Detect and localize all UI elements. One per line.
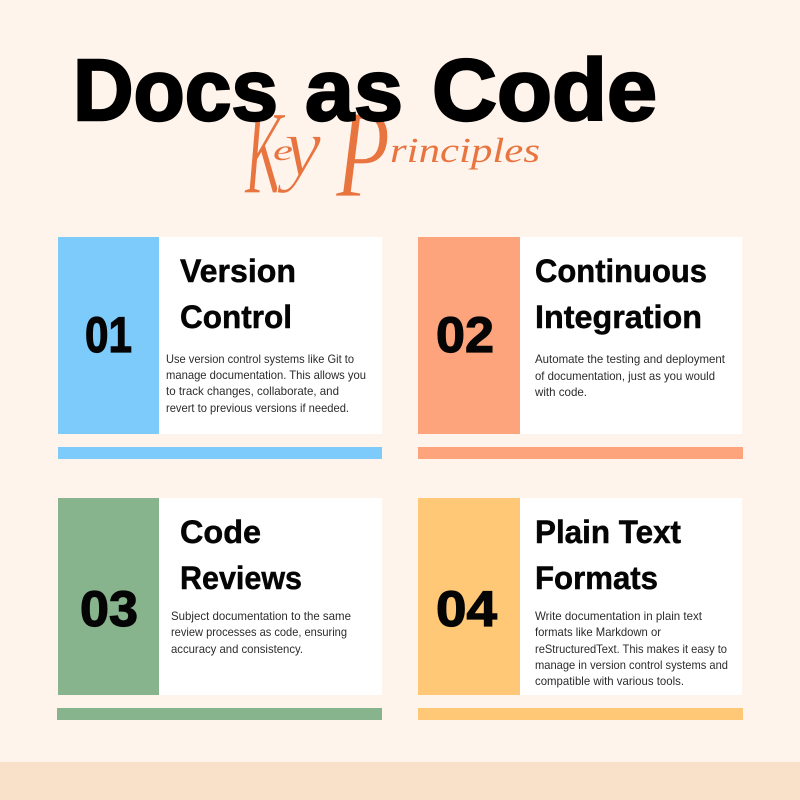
title: Docs — [73, 42, 278, 139]
title: as — [305, 42, 403, 139]
panel background — [520, 498, 742, 695]
body text — [535, 610, 728, 688]
body text — [171, 610, 351, 656]
panel background — [159, 237, 382, 434]
body text: with code. — [534, 386, 587, 399]
title: Code — [432, 42, 657, 139]
accent bar — [418, 447, 743, 459]
number block — [58, 498, 159, 695]
title — [73, 42, 657, 139]
heading — [535, 514, 681, 596]
panel: 04 plain text formats — [418, 498, 743, 720]
heading: Continuous — [535, 253, 707, 289]
heading — [180, 253, 296, 335]
heading: Reviews — [180, 560, 302, 596]
heading — [180, 514, 302, 596]
panel background — [520, 237, 742, 434]
subtitle: key principles: rinciples — [390, 131, 540, 170]
subtitle: key principles — [244, 86, 540, 224]
heading — [535, 253, 707, 335]
number: 04 — [436, 581, 497, 637]
number: 02 — [436, 307, 494, 363]
accent bar — [418, 708, 743, 720]
number: 01 — [85, 307, 132, 363]
body text: Automate the testing and deployment — [535, 353, 726, 366]
panel background — [159, 498, 382, 695]
bottom band — [0, 762, 800, 800]
number block — [418, 237, 520, 434]
accent bar — [58, 447, 382, 459]
body text: Subject documentation to the same — [171, 610, 351, 623]
body text: reStructuredText. This makes it easy to — [535, 643, 727, 656]
number block — [418, 498, 520, 695]
body text: review processes as code, ensuring — [171, 626, 347, 639]
body text — [534, 353, 726, 399]
panel: 01 version control — [58, 237, 382, 459]
heading: Control — [180, 299, 292, 335]
heading: Formats — [535, 560, 658, 596]
body text: manage in version control systems and — [535, 659, 728, 672]
accent bar — [57, 708, 382, 720]
heading: Integration — [535, 299, 702, 335]
number: 03 — [80, 581, 138, 637]
heading: Version — [180, 253, 296, 289]
body text: accuracy and consistency. — [171, 643, 303, 656]
panel: 02 continuous integration — [418, 237, 743, 459]
body text: formats like Markdown or — [535, 626, 661, 639]
heading: Plain Text — [535, 514, 681, 550]
body text: Use version control systems like Git to — [166, 353, 354, 366]
panel: 03 code reviews — [57, 498, 382, 720]
body text — [166, 353, 366, 415]
body text: Write documentation in plain text — [535, 610, 703, 623]
subtitle: key principles: y — [276, 100, 321, 194]
body text: manage documentation. This allows you — [166, 369, 366, 382]
number block — [58, 237, 159, 434]
body text: revert to previous versions if needed. — [166, 402, 349, 415]
subtitle: key principles: K — [244, 86, 286, 219]
body text: to track changes, collaborate, and — [166, 385, 339, 398]
subtitle: key principles: P — [335, 86, 390, 224]
heading: Code — [180, 514, 261, 550]
subtitle: key principles: e — [273, 134, 293, 167]
body text: compatible with various tools. — [535, 675, 684, 688]
body text: of documentation, just as you would — [535, 370, 715, 383]
